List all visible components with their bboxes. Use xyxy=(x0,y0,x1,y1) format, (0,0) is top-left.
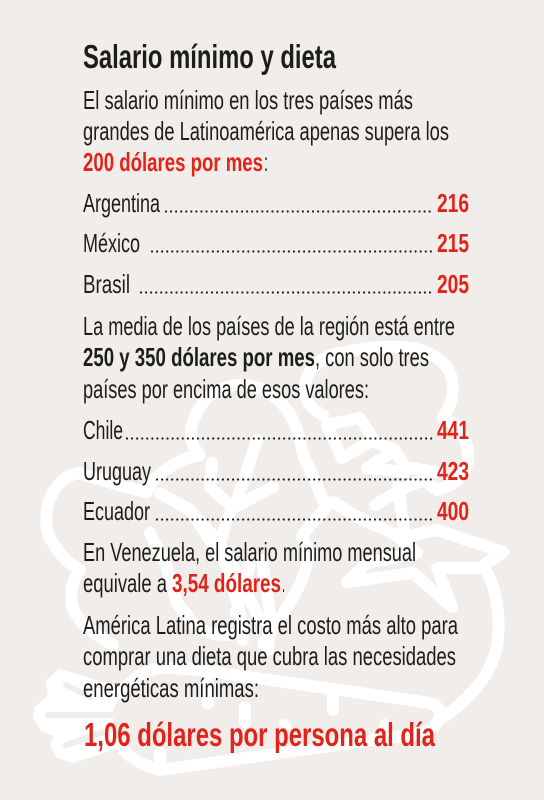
text block: regional average: 250 y 350 dólares por mes xyxy=(83,342,315,372)
row: Argentina: Argentina xyxy=(83,188,160,218)
row: Uruguay xyxy=(83,456,469,486)
text block: intro: 200 dólares por mes xyxy=(83,147,263,177)
text block: Venezuela: equivale a xyxy=(83,568,167,598)
row: México: 215 xyxy=(437,228,469,258)
icon: tomato top xyxy=(305,347,468,490)
text block: intro xyxy=(83,85,449,177)
row: Argentina: 216 xyxy=(437,188,469,218)
text block: Venezuela xyxy=(83,537,416,598)
text block: Venezuela: . xyxy=(282,568,285,598)
icon: carrot leaves xyxy=(36,672,130,760)
title: Salario mínimo y dieta xyxy=(83,38,336,75)
text block: regional average: países por encima de esos valores: xyxy=(83,374,369,404)
row: México: México xyxy=(83,228,140,258)
text block: diet cost: energéticas mínimas: xyxy=(83,673,259,703)
icon: broccoli outline xyxy=(46,385,326,645)
icon: broccoli stems xyxy=(150,440,273,650)
icon: leaves on tomato xyxy=(327,418,503,607)
text block: intro: El salario mínimo en los tres países más xyxy=(83,85,413,115)
row: Ecuador: 400 xyxy=(437,496,469,526)
row: Brasil: 205 xyxy=(437,269,469,299)
row: Uruguay: 423 xyxy=(437,456,469,486)
row: Ecuador: Ecuador xyxy=(83,496,150,526)
row: Uruguay: Uruguay xyxy=(83,456,151,486)
text block: intro: : xyxy=(264,147,268,177)
row: Chile xyxy=(83,415,469,445)
text block: regional average: , con solo tres xyxy=(315,342,429,372)
icon: tomato body xyxy=(443,573,499,717)
icon: carrot xyxy=(112,668,441,770)
row: Chile: 441 xyxy=(437,415,469,445)
row: Brasil xyxy=(83,269,469,299)
row: México xyxy=(83,228,469,258)
text block: Venezuela: 3,54 dólares xyxy=(172,568,281,598)
row: Brasil: Brasil xyxy=(83,269,130,299)
row: Ecuador xyxy=(83,496,469,526)
text block: regional average xyxy=(83,311,455,404)
icon: carrot ticks xyxy=(160,682,385,768)
row: Argentina xyxy=(83,188,469,218)
row: Chile: Chile xyxy=(83,415,123,445)
text block: diet cost xyxy=(83,610,458,703)
illustration: white line-art vegetables xyxy=(36,347,503,770)
